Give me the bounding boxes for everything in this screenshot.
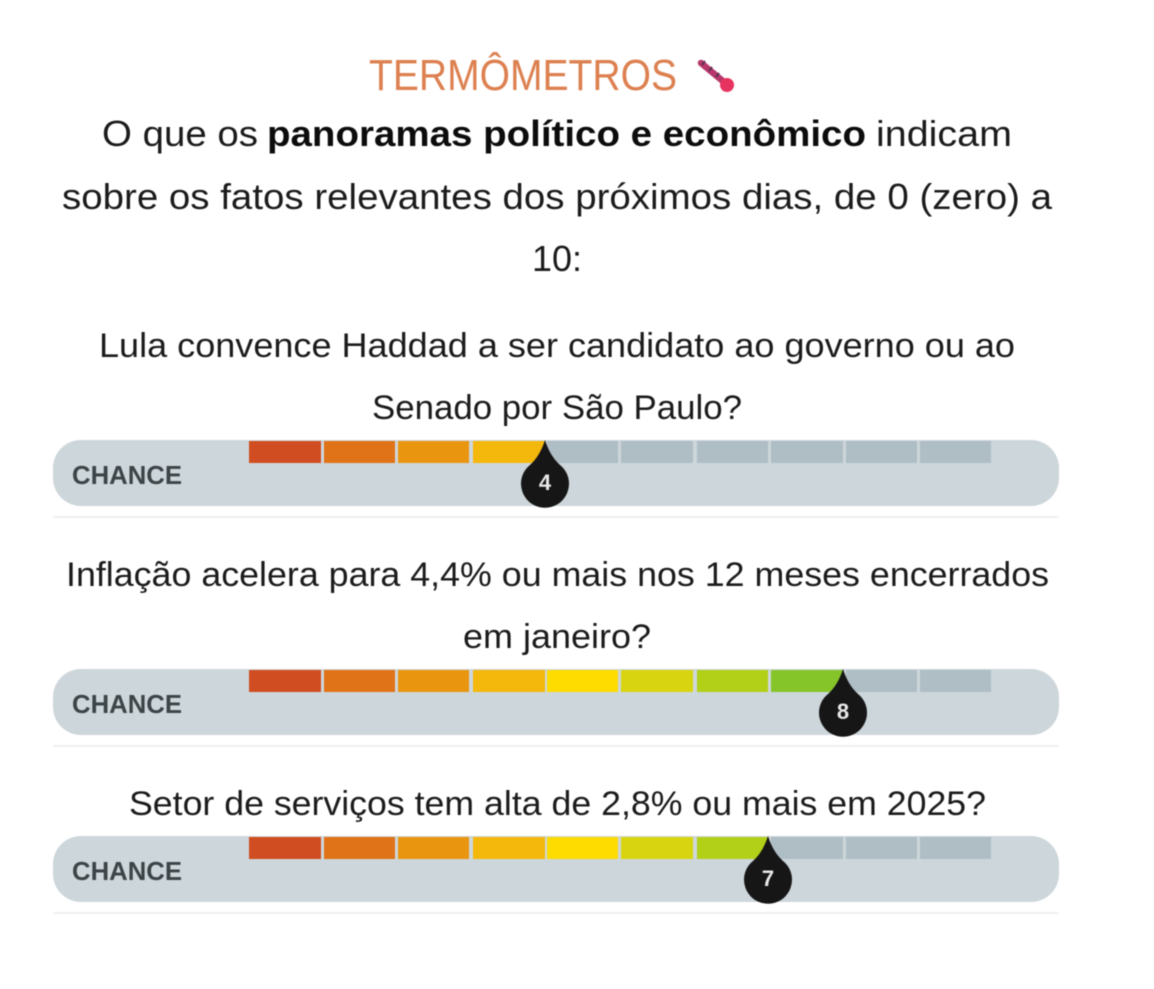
- scale segments: [249, 837, 991, 859]
- marker: 8: 8: [837, 699, 849, 724]
- intro text: sobre os fatos relevantes dos próximos dias, de 0 (zero) a: [62, 176, 1053, 217]
- question 2: em janeiro?: [463, 618, 651, 656]
- question 2: Inflação acelera para 4,4% ou mais nos 12 meses encerrados: [66, 556, 1049, 594]
- question 1: Senado por São Paulo?: [372, 389, 742, 427]
- question 1: Lula convence Haddad a ser candidato ao governo ou ao: [99, 327, 1015, 365]
- marker: 4: [521, 440, 569, 508]
- icon: thermometer: [701, 61, 734, 92]
- title: TERMÔMETROS: [369, 50, 677, 100]
- marker: 4: 4: [539, 470, 552, 495]
- marker: 8: [819, 669, 867, 737]
- label: chance: CHANCE: [72, 460, 182, 490]
- gauge 2: chance 8: [53, 669, 1059, 737]
- scale segments: [249, 670, 991, 692]
- intro text: O que os: [102, 113, 258, 154]
- intro text: [62, 113, 1053, 279]
- question 1: [99, 327, 1015, 427]
- question 3: Setor de serviços tem alta de 2,8% ou mais em 2025?: [129, 785, 986, 823]
- label: chance: CHANCE: [72, 689, 182, 719]
- scale segments: [249, 441, 991, 463]
- intro text: panoramas político e econômico: [267, 113, 866, 154]
- gauge 3: chance 7: [53, 836, 1059, 904]
- intro text: indicam: [876, 113, 1012, 154]
- gauge 1: chance 4: [53, 440, 1059, 508]
- marker: 7: [744, 836, 792, 904]
- marker: 7: 7: [762, 866, 774, 891]
- intro text: 10:: [532, 238, 582, 279]
- question 2: [66, 556, 1049, 656]
- label: chance: CHANCE: [72, 856, 182, 886]
